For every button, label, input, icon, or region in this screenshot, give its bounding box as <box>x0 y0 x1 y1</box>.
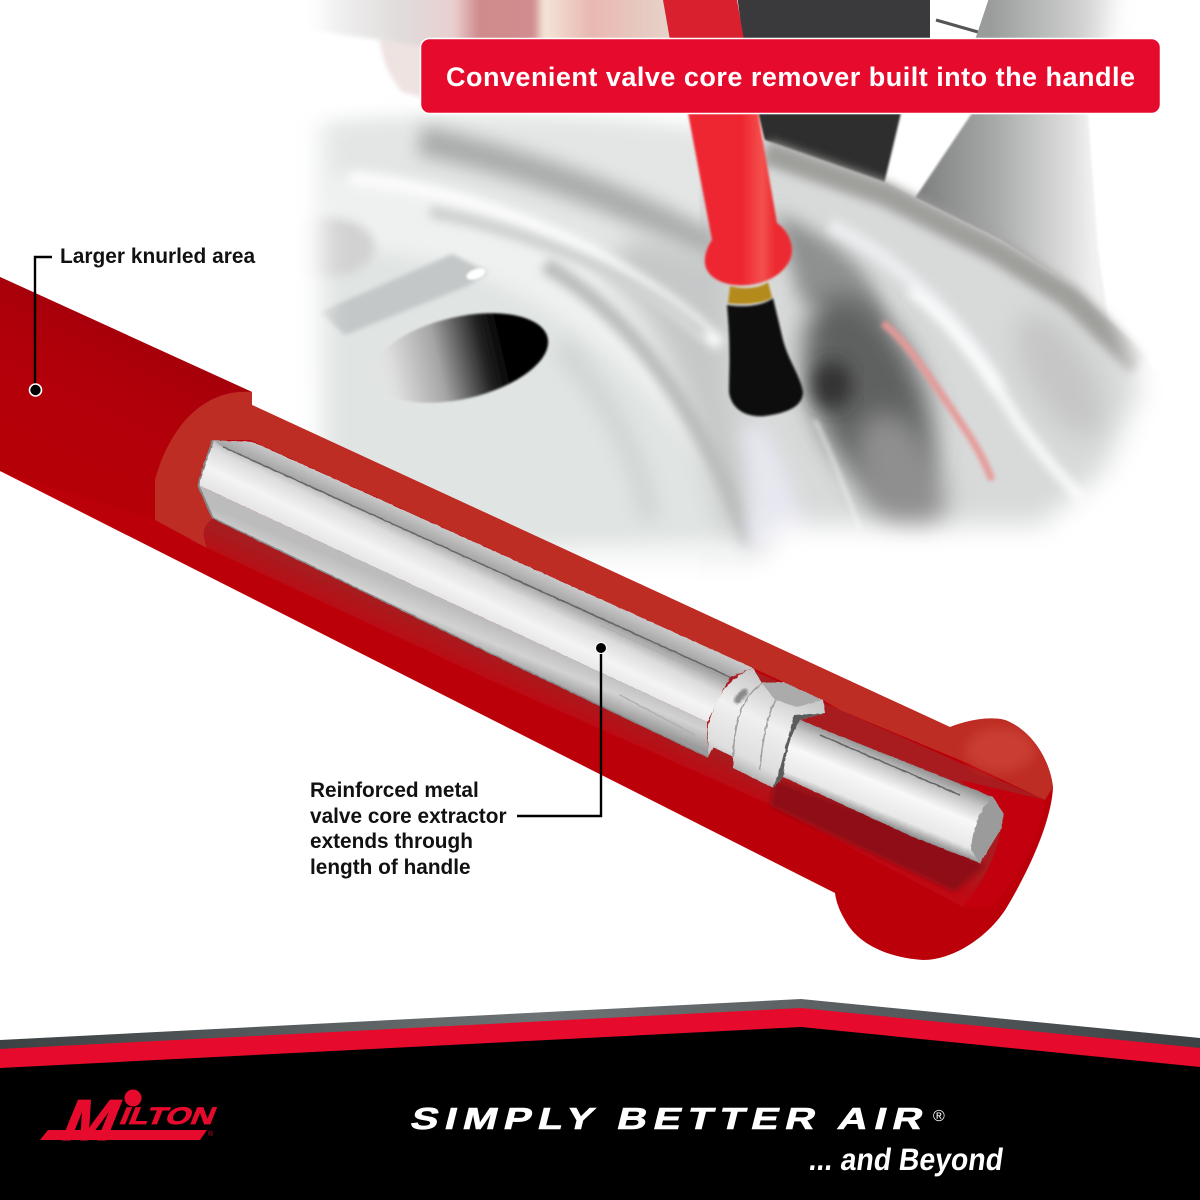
spoke vent <box>318 216 377 276</box>
metal extractor rod <box>198 440 753 757</box>
wheel rim body <box>311 110 1147 564</box>
callout: reinforced metal extractor <box>310 642 606 879</box>
tagline: SIMPLY BETTER AIR <box>407 1102 934 1136</box>
tagline: ... and Beyond <box>807 1143 1006 1177</box>
handle shell <box>0 277 1053 960</box>
metal pin <box>783 720 1003 863</box>
handle cutaway illustration <box>0 277 1053 960</box>
metal collar <box>708 668 825 788</box>
knurled section <box>0 277 252 520</box>
logo: Milton: ® <box>208 1130 214 1138</box>
icon: red valve tool in photo <box>663 0 803 416</box>
callout: larger knurled area: Larger knurled area <box>60 245 255 268</box>
brass valve stem <box>728 282 772 304</box>
callout: reinforced metal extractor: Reinforced metal <box>310 779 479 802</box>
tagline: ® <box>933 1108 945 1125</box>
logo: Milton: ILTON <box>116 1103 221 1130</box>
wheel bolt hole <box>389 312 550 404</box>
callout: larger knurled area <box>30 245 255 396</box>
footer band <box>0 999 1200 1200</box>
hand holding tool <box>326 0 670 98</box>
callout: reinforced metal extractor: extends through <box>310 830 473 853</box>
inner cavity wall <box>190 442 1045 908</box>
tagline <box>407 1102 1006 1177</box>
callout: reinforced metal extractor: length of handle <box>310 856 471 879</box>
logo: Milton: M <box>53 1088 131 1153</box>
photo: tyre valve on steel wheel <box>311 0 1147 564</box>
header banner: Convenient valve core remover built into the handle <box>446 62 1135 92</box>
header banner <box>420 38 1160 114</box>
callout: reinforced metal extractor: valve core extractor <box>310 805 507 828</box>
black rubber valve <box>727 298 803 416</box>
cut face <box>155 392 1053 800</box>
background machinery <box>737 0 1135 330</box>
logo: Milton <box>40 1088 221 1153</box>
